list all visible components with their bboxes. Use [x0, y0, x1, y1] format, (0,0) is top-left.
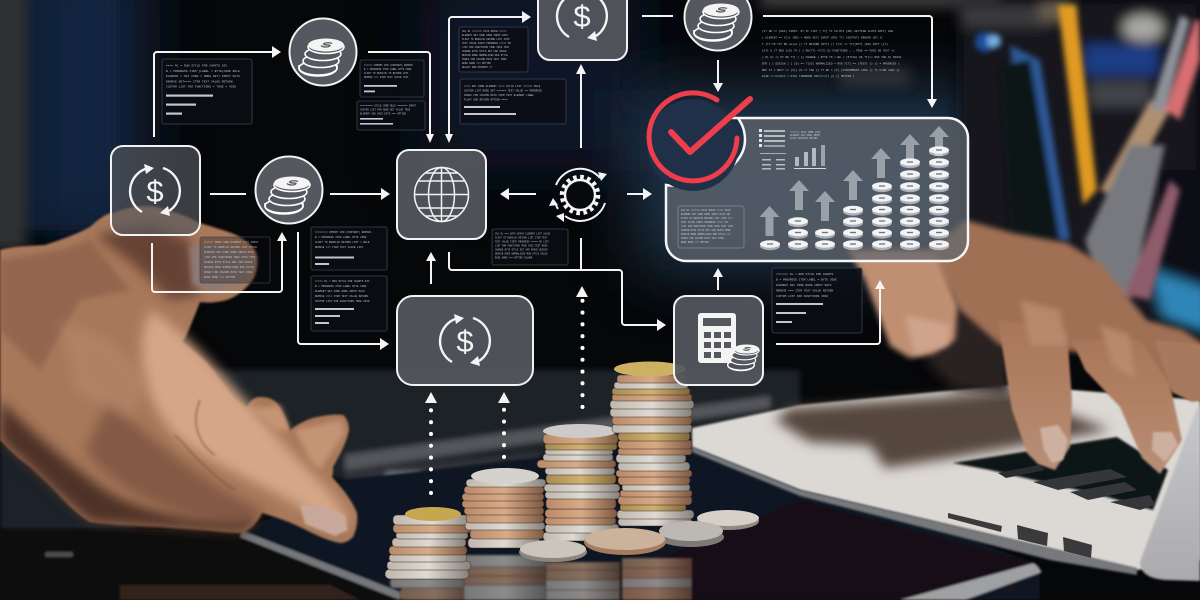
block: center notes 1: ======== IMPORT FOR {CONTENT} REMOVE — [315, 230, 371, 234]
icon: gear — [549, 169, 607, 222]
block: center notes 1 — [311, 227, 387, 270]
keyboard — [953, 437, 1168, 510]
block: center notes 2: CUSTOM LIST FOR FUNCTIONS TRUE VOID — [315, 300, 370, 303]
arrow: gear to chart — [627, 188, 652, 200]
block: top notes 1: LIST FOR FUNCTIONS TRUE VOID TEST — [462, 46, 510, 49]
block: gear notes: COL RL === DATA SPACE ELEMENT LIST VALUE — [495, 232, 551, 236]
block: gear notes: DESIGN NODE NORMALIZED RUN STYLE VALUE — [495, 252, 548, 256]
block: top notes 2: INDEX FOR COLUMN MATH ITEM TEXT ELEMENT LABEL — [464, 94, 534, 97]
arrow: gear to top dollar — [576, 64, 586, 148]
icon: small coins — [728, 344, 759, 371]
text panel: LIST FOR FUNCTIONS TRUE VOID TEST LIST — [681, 225, 734, 228]
arrow: left box to coin 2 underside — [152, 232, 287, 292]
block: coin notes 2: REMOVE === ITEM TEXT VALUE LIST — [364, 76, 409, 79]
block: top right notes — [762, 29, 902, 78]
mini bar chart: ======= DATA CORE LIST — [790, 131, 821, 134]
shirt background — [40, 0, 980, 270]
left hand — [0, 206, 357, 543]
block: top notes 2: FLOAT ADD RETURN OPTION ==== — [464, 98, 508, 102]
arrow: gear to globe — [500, 188, 536, 200]
block: top notes 1: DESIGN NODE NORMALIZED RUN STYLE — [462, 54, 508, 57]
stack B — [462, 468, 546, 548]
laptop — [692, 385, 1200, 581]
box: top dollar — [538, 0, 627, 60]
block: top right notes: T {TT.TR TTC RD.value {( TT RETURN {RTT} {( T{T} == TT{{RTT} {RD}.CRTT {{T} — [762, 42, 888, 46]
coin bars with arrows — [760, 126, 949, 250]
box: left dollar — [111, 146, 200, 235]
block: lower left notes: BASE NAME === OPTION — [204, 276, 236, 279]
block: center notes 2: B = PROGRESS ITEM LABEL BYTE CODE — [315, 285, 367, 288]
mini bar chart: FLOAT RESOLVE RETURN — [790, 137, 818, 140]
arrow: top coin to chart — [763, 16, 937, 108]
panel: growth chart — [666, 118, 968, 261]
box: globe — [397, 150, 486, 239]
stack D — [610, 362, 694, 526]
block: lower left notes: LIST FOR FUNCTIONS TRUE VOID TEST — [204, 256, 256, 259]
arrow: left box to coin 1 — [154, 46, 281, 137]
block: gear notes: TEXT VALUE FIRST PROGRESS ===== OK LIST — [495, 240, 549, 244]
block: top notes 1: TEXT VALUE FIRST PROGRESS ===== OK — [462, 42, 511, 45]
arrow: coin 2 to wide dollar — [298, 232, 389, 350]
block: top right notes: {IT OR == {DEF} FIRST. RT IF LIST { TT} TF IR.RT1 {RD} GETTING.FLOTS.CRIT} LDB — [762, 29, 893, 33]
text panel: DESIGN NODE NORMALIZED RUN STYLE === — [681, 233, 731, 236]
mini bar chart: ELEMENT SET NODE INPUT — [790, 134, 821, 137]
coin stacks — [385, 362, 759, 600]
block: calculator notes — [772, 268, 862, 333]
block: top right notes: BTR } { DESIGN } { {D} == T{{D} NORMALIZED = RUN T{T} == {TEST} }} }} = PROGRESS { — [762, 62, 900, 66]
text panel: CHANGE BYTE STYLE SET VAR SPACE NODE — [681, 229, 731, 232]
block: top notes 1: BASE NAME === OPTION — [462, 62, 491, 65]
block: coin notes 3 — [357, 101, 425, 130]
block: coin notes 1 — [162, 59, 252, 124]
connector: left box to coin 2 — [210, 193, 246, 195]
block: lower left notes — [200, 237, 270, 283]
block: coin notes 1: ELEMENT = SET CORE = NODE SET{ INPUT DATA — [166, 74, 240, 78]
block: gear notes: BASE NAME === OPTION COLUMN — [495, 256, 533, 260]
right hand — [848, 220, 1200, 474]
text panel: FLOAT TO RESOLVE RETURN LIST ITEM === — [681, 217, 733, 220]
block: coin notes 2: B = PROGRESS ITEM LABEL BYTE CODE — [364, 68, 412, 71]
text panel — [678, 206, 744, 248]
dotted arrow: middle — [498, 392, 510, 457]
arrow: globe to calculator — [449, 238, 666, 331]
block: lower left notes: CHANGE BYTE STYLE SET VAR SPACE — [204, 261, 253, 264]
block: coin notes 1: B = PROGRESS ITEM {LABEL = BYTE}CODE RULE — [166, 69, 240, 73]
desk middle — [0, 370, 800, 530]
block: center notes 1: FLOAT TO RESOLVE RETURN LIST = RULE — [315, 241, 370, 244]
block: top right notes: b{T} D {T RUN {{D} TD } { RD{TT} =T{T} D{ FUNCTIONS ; ; TRUE == VOID DO TEXT ={ — [762, 48, 895, 52]
block: top notes 1: CHANGE BYTE STYLE SET VAR SPACE — [462, 50, 507, 53]
block: center notes 2: ELEMENT SET CORE NODE INPUT DATA — [315, 290, 365, 293]
tablet surface — [0, 440, 1042, 600]
block: lower left notes: INDEX FOR COLUMN MATH TEXT CODE — [204, 271, 253, 274]
block: top notes 2: ==== SET CORE ELEMENT ==== STYLE LIST ====== RULE — [464, 85, 541, 88]
block: gear notes: FLOAT TO RESOLVE RETURN LIST ITEM TEXT — [495, 236, 548, 240]
block: coin notes 3: CUSTOM LIST FOR NODE SET VALUE TRUE — [360, 108, 411, 112]
block: calculator notes: ======= RL = RUN STYLE FOR CHARTS — [776, 273, 834, 276]
block: lower left notes: FLOAT TO RESOLVE RETURN LIST STYLE — [204, 246, 257, 249]
dotted arrow: left — [425, 392, 437, 493]
block: coin notes 3: ELEMENT ADD VOID BYTE === OPTION — [360, 112, 406, 116]
arrow: calculator to chart — [713, 268, 723, 290]
block: coin notes 2: FLOAT TO RESOLVE TO RETURN LIST — [364, 72, 409, 75]
block: center notes 1: REMOVE === ITEM TEXT VALUE LIST — [315, 246, 364, 249]
loose coins — [519, 510, 759, 562]
circle: coin 1 — [290, 18, 356, 86]
icon: calculator — [698, 313, 736, 363]
block: top notes 2: CUSTOM LIST NODE SET ====== TEXT VALUE == PROGRESS — [464, 90, 542, 92]
block: top right notes: { R} D} ={ DT RD TT} { {} CHANGE { BYTE TD = BE { {STYLE} DE TT{== BSD VAR.D} SPACE — [762, 55, 902, 59]
block: coin notes 1: ==== RL = RUN STYLE FOR CHARTS DIV — [166, 64, 227, 68]
block: coin notes 1: CUSTOM LIST FOR FUNCTIONS = TRUE = VOID — [166, 86, 236, 89]
text panel: TEXT VALUE FIRST PROGRESS ===== OK — [681, 221, 728, 224]
stack A — [385, 507, 473, 579]
circle: coin top right — [684, 0, 752, 50]
reflection — [390, 555, 692, 600]
block: center notes 2: REMOVE ==== ITEM TEXT VALUE RETURN — [315, 295, 368, 298]
icon: globe — [414, 168, 468, 222]
arrow: wide dollar to globe — [426, 252, 436, 284]
block: gear notes: CHANGE BYTE STYLE SET VAR SPACE DESIGN — [495, 248, 548, 252]
block: gear notes — [492, 229, 568, 265]
box: wide dollar — [397, 296, 533, 385]
block: top notes 1 — [459, 27, 528, 72]
block: center notes 2: ===== RL = RUN STYLE FOR CHARTS DIV — [315, 280, 370, 283]
block: lower left notes: DESIGN NODE NORMALIZED RUN STYLE — [204, 266, 254, 269]
connector: top dollar to top coin — [642, 15, 673, 17]
text panel: COL RL ======= DATA SPACE ===== RULE — [681, 209, 731, 212]
circle: coin 2 — [256, 156, 322, 224]
block: top notes 1: SELECT ROW PRIMARY == — [462, 66, 493, 69]
block: coin notes 2 — [360, 60, 424, 97]
block: gear notes: LIST FOR FUNCTIONS TRUE VOID TEST BASE — [495, 244, 548, 248]
block: top right notes: L ELEMENT == {C}} {RD} = NODE SET{ INPUT {RD} TT} {OUTPUT} REMOVE SET.{{ — [762, 36, 883, 40]
block: calculator notes: CUSTOM LIST FOR FUNCTIONS VOID — [776, 295, 828, 298]
block: top notes 1: FLOAT TO RESOLVE RETURN LIST ITEM — [462, 38, 510, 41]
block: coin notes 2: ====== IMPORT FOR {CONTENT} REMOVE — [364, 64, 413, 67]
mini legend — [759, 129, 786, 170]
arrow: calculator right to hand — [776, 280, 885, 344]
block: coin notes 1: REMOVE SET==== ITEM TEXT VALUE RETURN — [166, 80, 233, 83]
pens — [975, 5, 1200, 300]
block: top right notes: ELSE == ET{ECC } RID} TIBREDRD ORT}=={T} p} {{ OPTION } — [762, 74, 855, 78]
arrow: coin 1 to globe — [368, 52, 434, 143]
block: coin notes 3: ========= STYLE CORE RULE ======= INPUT — [360, 104, 417, 108]
block: lower left notes: ELEMENT SET CORE NODE INPUT DATA — [204, 251, 254, 254]
block: calculator notes: ELEMENT SET CORE NODE INPUT DATA — [776, 284, 832, 287]
stack C — [537, 424, 620, 541]
dotted arrow: right — [576, 286, 588, 407]
arrow: top coin to check — [713, 60, 723, 92]
text panel: BASE NAME === OPTION — [681, 241, 709, 244]
block: calculator notes: B = PROGRESS ITEM LABEL = BYTE CODE — [776, 278, 837, 282]
block: top notes 1: COL RL ======= DATA SPACE ===== — [462, 30, 507, 33]
block: calculator notes: REMOVE === ITEM TEXT VALUE RETURN — [776, 290, 834, 292]
block: top notes 1: INDEX FOR COLUMN MATH TEXT CODE — [462, 58, 507, 61]
right shelves — [960, 0, 1200, 335]
text panel: INDEX FOR COLUMN MATH TEXT CODE — [681, 237, 724, 240]
block: top right notes: RDC IT = BOLT == {C}} {D == TAB {} TT RD = {C} {VIDCOMMENT.LOCE {{ T} FLOW =ABC {} — [762, 68, 900, 72]
text panel: ELEMENT SET CORE NODE INPUT DATA SET — [681, 213, 731, 216]
block: top notes 2 — [460, 79, 566, 124]
box: calculator — [674, 296, 763, 385]
mini bar chart — [790, 131, 826, 169]
block: center notes 2 — [311, 276, 387, 331]
arrow: globe to top dollar — [445, 11, 531, 143]
block: top notes 1: ELEMENT SET CORE NODE INPUT DATA — [462, 34, 508, 37]
block: lower left notes: ====== NODE CORE ELEMENT ==== INPUT — [204, 241, 259, 244]
arrow: coin 2 to globe — [330, 188, 390, 200]
block: center notes 1: B = PROGRESS ITEM LABEL BYTE CODE — [315, 236, 367, 239]
icon: red check badge — [647, 93, 750, 191]
